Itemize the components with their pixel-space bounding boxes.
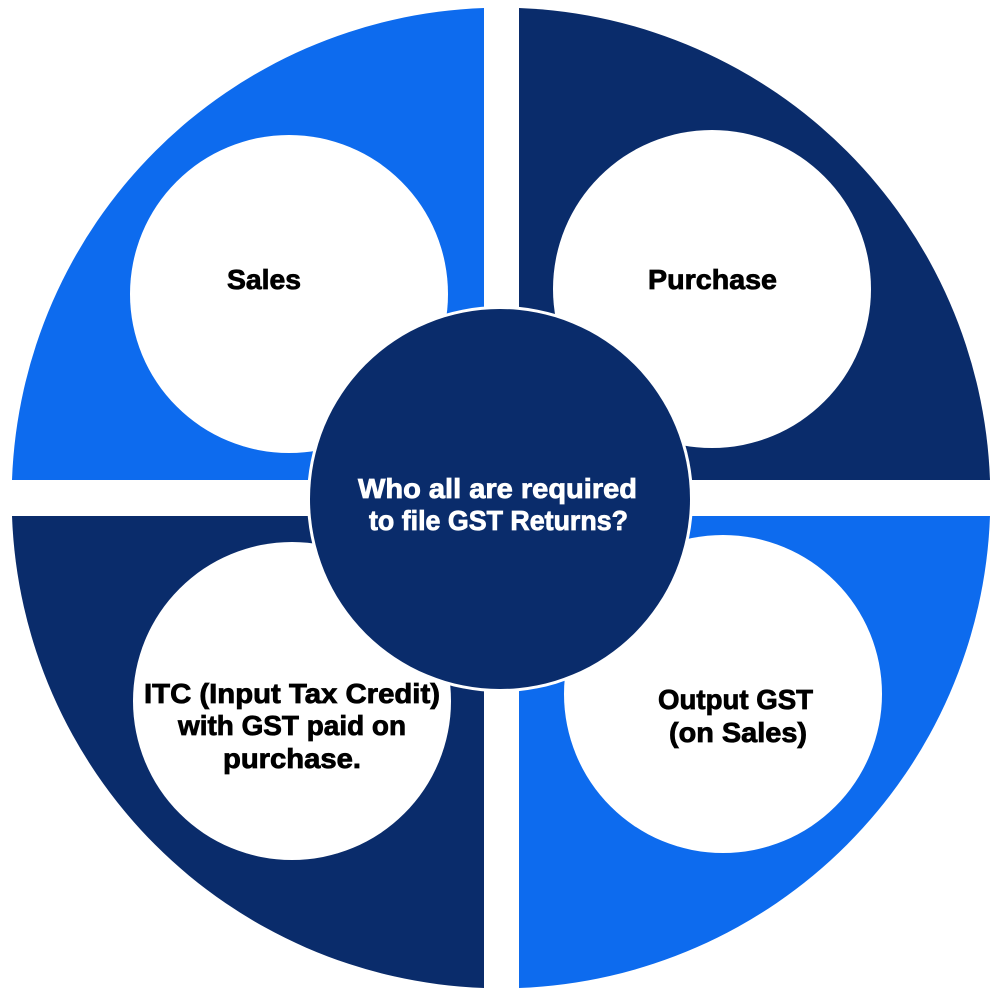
label: ITC: purchase. <box>223 743 361 774</box>
panel: purchase quadrant <box>519 8 990 480</box>
label: purchase: Purchase <box>648 264 777 295</box>
circle: sales <box>130 135 448 453</box>
panel: ITC quadrant <box>12 516 484 988</box>
label: sales: Sales <box>227 264 301 295</box>
label: output GST <box>658 684 813 748</box>
panel: output GST quadrant <box>519 516 990 988</box>
circle: output GST <box>564 535 882 853</box>
panel: sales quadrant <box>12 8 484 480</box>
circle: ITC <box>133 542 451 860</box>
label: output GST: Output GST <box>658 684 813 715</box>
center question: to file GST Returns? <box>369 505 628 536</box>
center hub <box>307 306 693 692</box>
label: ITC: with GST paid on <box>177 710 406 741</box>
label: ITC <box>144 678 440 774</box>
center question <box>358 473 637 536</box>
circle: purchase <box>553 130 871 448</box>
label: ITC: ITC (Input Tax Credit) <box>144 678 440 709</box>
center question: Who all are required <box>358 473 637 504</box>
label: output GST: (on Sales) <box>669 717 807 748</box>
